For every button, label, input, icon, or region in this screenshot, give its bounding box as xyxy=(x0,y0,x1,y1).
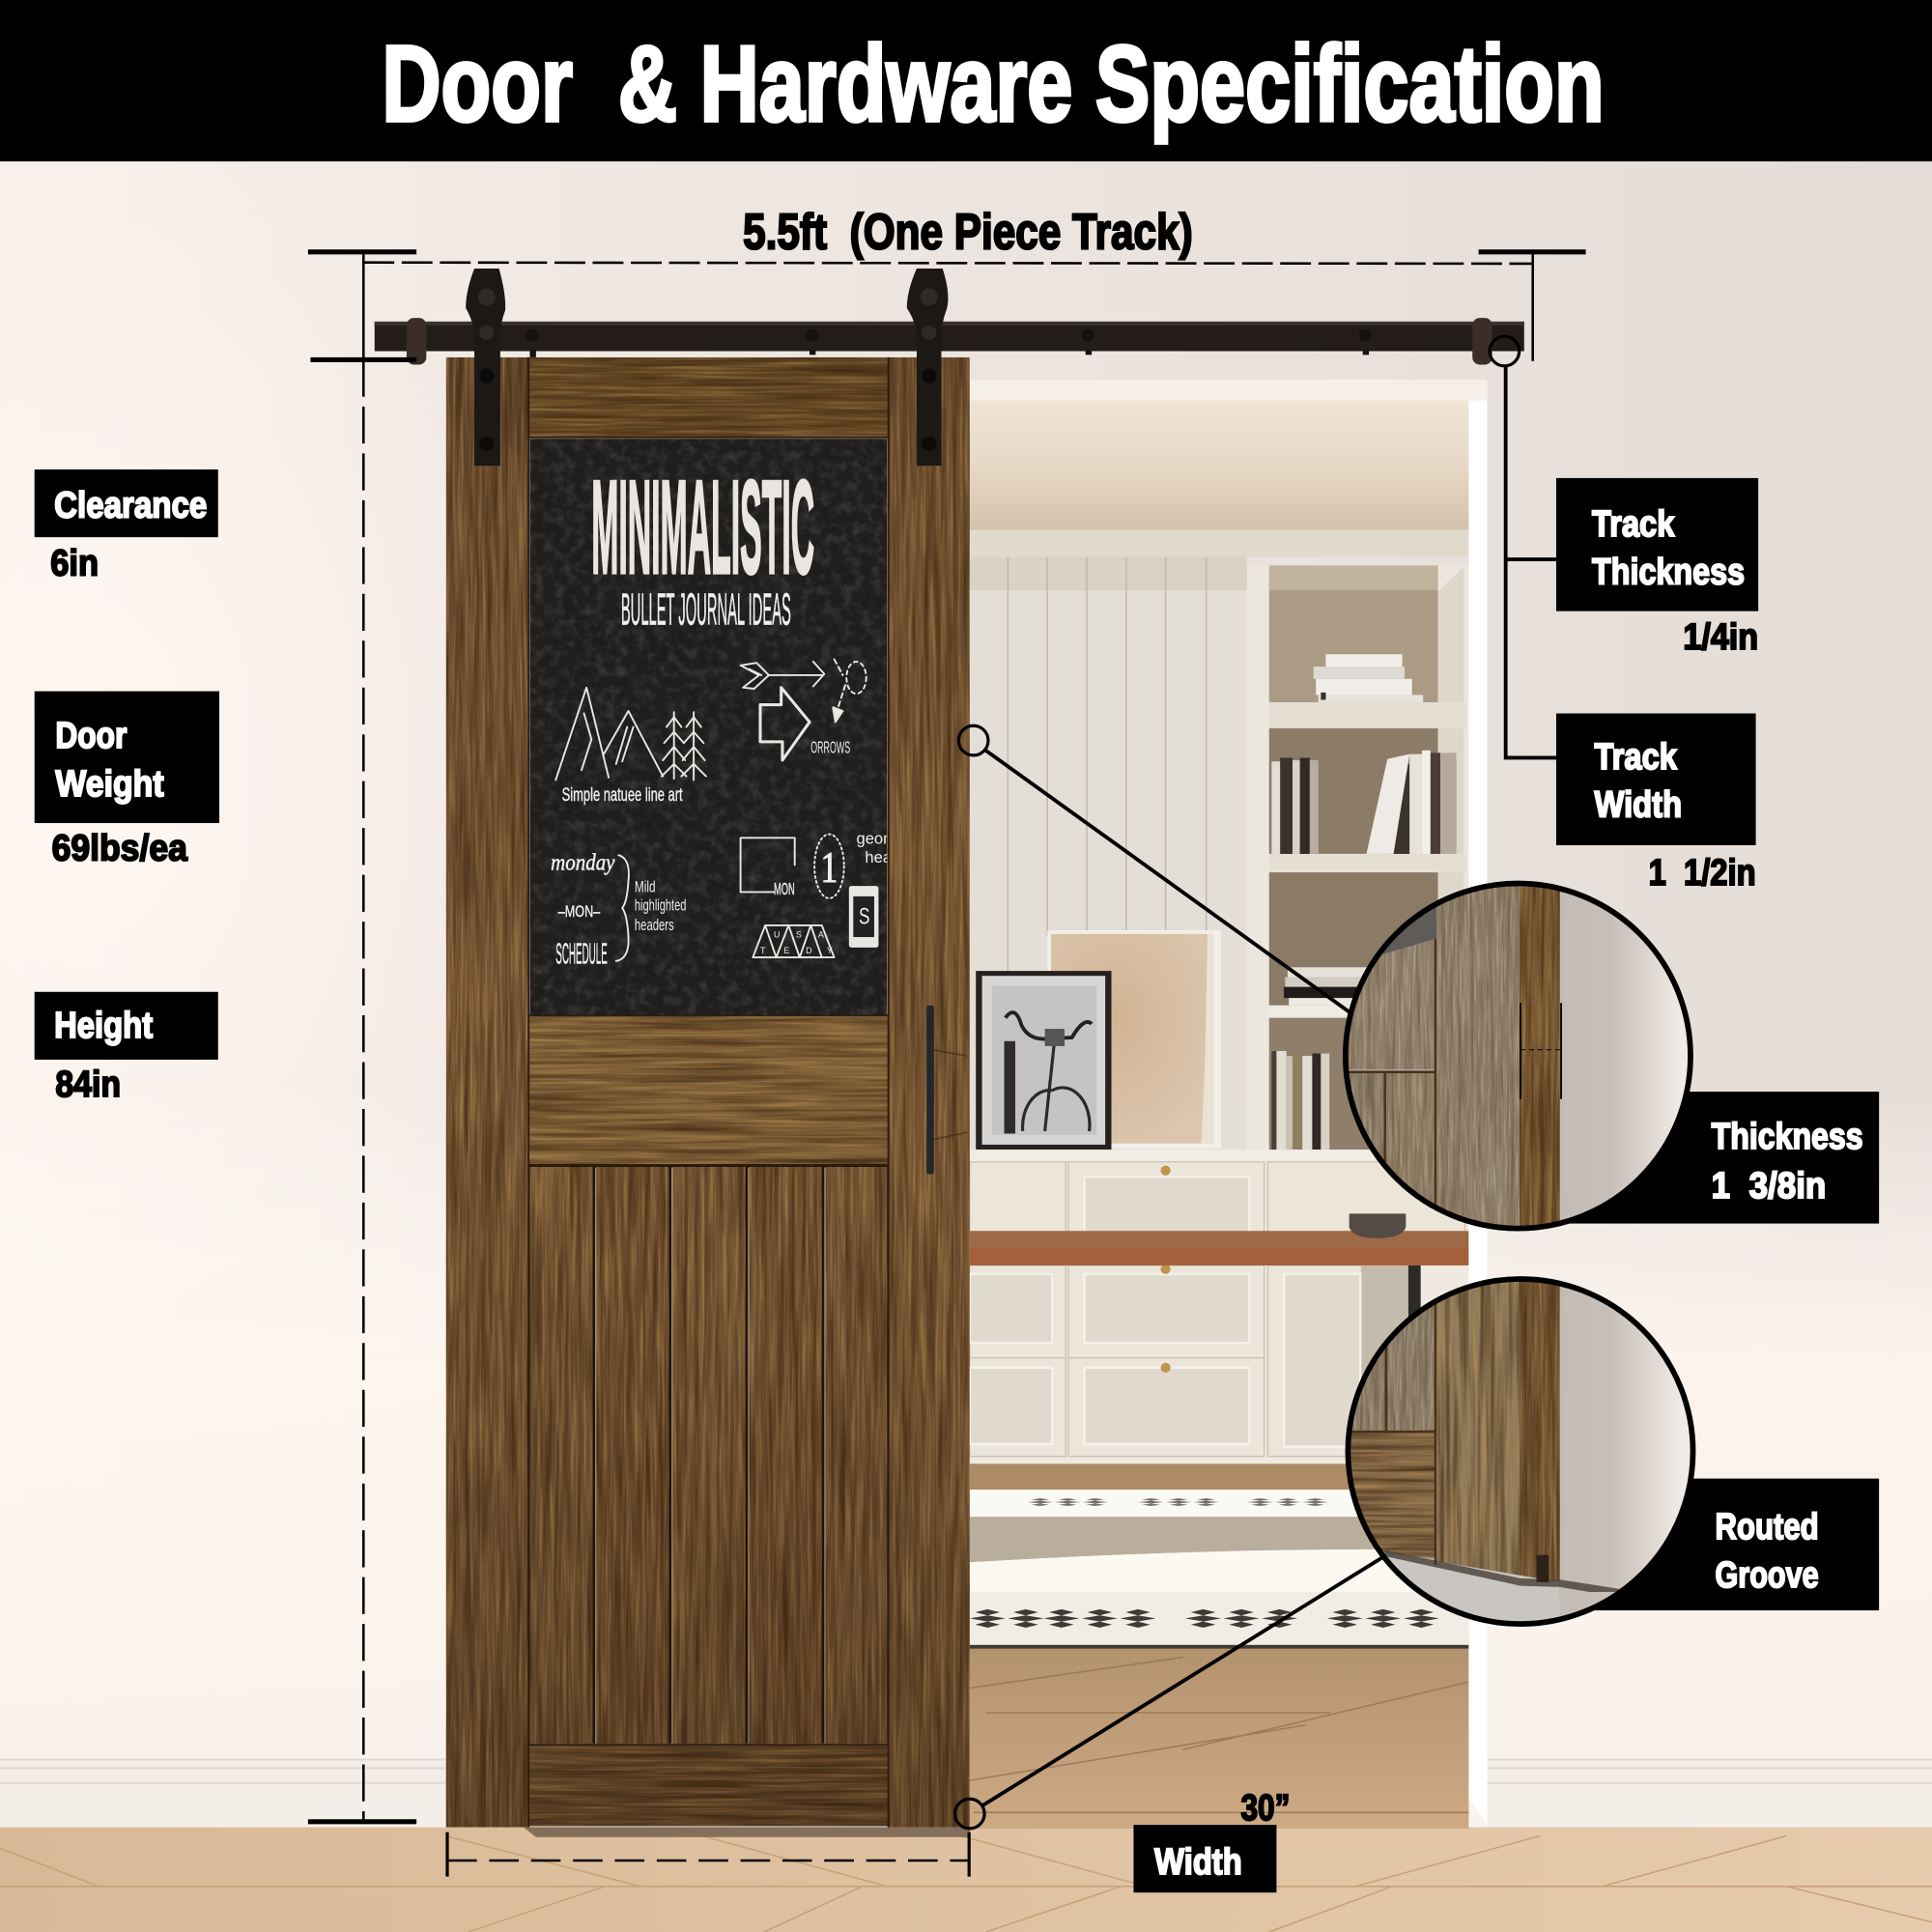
text: MINIMALISTIC xyxy=(591,453,814,602)
bookshelf xyxy=(1247,565,1468,1161)
floor foreground xyxy=(0,1828,1932,1932)
thickness marks xyxy=(1520,1003,1561,1099)
chalkboard: SCHEDULE xyxy=(555,937,608,970)
spec: clearance: Clearance xyxy=(54,485,207,526)
soffit xyxy=(970,380,1488,401)
track rail xyxy=(375,322,1524,352)
spec: track thickness: Track xyxy=(1592,503,1675,545)
left hanger xyxy=(466,269,505,466)
chalk mountains and trees xyxy=(555,688,706,780)
chalk cropped note: geome xyxy=(856,830,905,848)
ceiling xyxy=(970,401,1468,529)
door handle xyxy=(926,1006,967,1175)
label box: thickness: Thickness xyxy=(1712,1116,1863,1157)
chalk frame with MON: MON xyxy=(774,879,795,898)
callout leader: thickness xyxy=(958,725,1350,1012)
spec: track thickness: 1/4in xyxy=(1683,616,1758,658)
wall art: framed bicycle photo xyxy=(976,971,1112,1150)
spec: door width xyxy=(1133,1787,1290,1892)
bottom rail xyxy=(528,1745,889,1826)
chalk arrows xyxy=(741,659,867,760)
right hanger xyxy=(907,269,948,466)
spec: track width: 1 1/2in xyxy=(1649,852,1756,894)
crown molding xyxy=(970,529,1468,557)
chalk note: headers xyxy=(635,916,674,934)
spec: height: Height xyxy=(54,1005,153,1046)
track and hangers xyxy=(375,269,1524,466)
spec: track thickness xyxy=(1556,478,1758,658)
chalk S box xyxy=(849,886,878,948)
spec: door width: 30” xyxy=(1240,1787,1290,1829)
end stops xyxy=(407,318,1492,365)
stiles xyxy=(446,357,528,1828)
bowl xyxy=(1350,1213,1406,1238)
planks xyxy=(528,1164,889,1744)
spec: door weight xyxy=(35,692,219,868)
magnifier: routed groove detail xyxy=(1343,1276,1700,1629)
chalk note xyxy=(636,881,686,930)
chalk headers examples xyxy=(551,850,615,970)
doorway interior scene xyxy=(931,380,1488,1829)
interior floor xyxy=(970,1463,1468,1829)
dimension line: door width xyxy=(447,1833,969,1877)
label box: routed groove xyxy=(1540,1479,1879,1610)
spec: door width: Width xyxy=(1154,1841,1242,1883)
rug xyxy=(931,1490,1468,1649)
track bolts xyxy=(526,329,1372,357)
chalk caption: nature: Simple natuee line art xyxy=(562,785,683,806)
chalk cropped note: head xyxy=(865,848,900,867)
spec: clearance xyxy=(35,469,218,584)
chalkboard: BULLET JOURNAL IDEAS xyxy=(621,584,791,635)
spec: door weight: Weight xyxy=(55,763,164,805)
desk top xyxy=(970,1231,1468,1265)
chalkboard xyxy=(529,439,905,1015)
spec: track thickness: Thickness xyxy=(1592,552,1745,593)
spec: track width xyxy=(1556,714,1756,894)
title band xyxy=(0,0,1932,161)
counter and cabinets xyxy=(970,1150,1468,1463)
chalk numbered badge xyxy=(814,835,844,898)
chalk note: highlighted xyxy=(635,896,686,915)
books top shelf xyxy=(1314,654,1423,702)
label box: thickness: 1 3/8in xyxy=(1712,1165,1826,1207)
books middle shelf xyxy=(1271,751,1457,854)
label box: routed groove: Groove xyxy=(1716,1554,1819,1596)
spec: height: 84in xyxy=(55,1064,121,1105)
spec: track width: Track xyxy=(1595,736,1678,778)
heading: track length: 5.5ft (One Piece Track) xyxy=(743,205,1193,261)
callout leader: routed groove xyxy=(955,1557,1382,1829)
door frame jamb xyxy=(1468,401,1488,1825)
magnifier: door thickness detail xyxy=(1343,881,1700,1238)
panel wall xyxy=(970,557,1247,1153)
chalk numbered badge: 1 xyxy=(820,842,838,892)
callout leader: track xyxy=(1490,336,1556,757)
chalk cropped note xyxy=(857,835,887,863)
dimension lines: track length and height xyxy=(308,251,1586,1822)
spec: height xyxy=(35,992,218,1105)
chalk frame with MON xyxy=(741,838,795,898)
chalk headers examples: monday xyxy=(551,850,615,876)
chalk brace xyxy=(616,855,629,961)
label box: thickness xyxy=(1540,1092,1879,1224)
label box: routed groove: Routed xyxy=(1716,1506,1819,1548)
chalk headers examples: –MON– xyxy=(558,902,601,921)
wall art: tan canvas xyxy=(1047,930,1221,1149)
interior floor boards xyxy=(970,1658,1468,1812)
chalkboard: ORROWS xyxy=(810,737,850,756)
door tone shading xyxy=(446,357,970,1828)
spec: door weight: 69lbs/ea xyxy=(52,827,188,868)
chalk note: Mild xyxy=(635,877,656,895)
chalk S box: S xyxy=(859,904,870,930)
books lower shelves xyxy=(1271,967,1368,1150)
spec: door weight: Door xyxy=(55,715,127,756)
top rail xyxy=(528,357,889,438)
spec: clearance: 6in xyxy=(50,543,99,584)
spec: track width: Width xyxy=(1595,784,1682,826)
middle rail xyxy=(528,1015,889,1164)
chalk tuesday pennants: TUESDAY xyxy=(760,930,833,955)
door shadow on floor xyxy=(524,1828,970,1837)
sliding barn door xyxy=(446,357,970,1828)
